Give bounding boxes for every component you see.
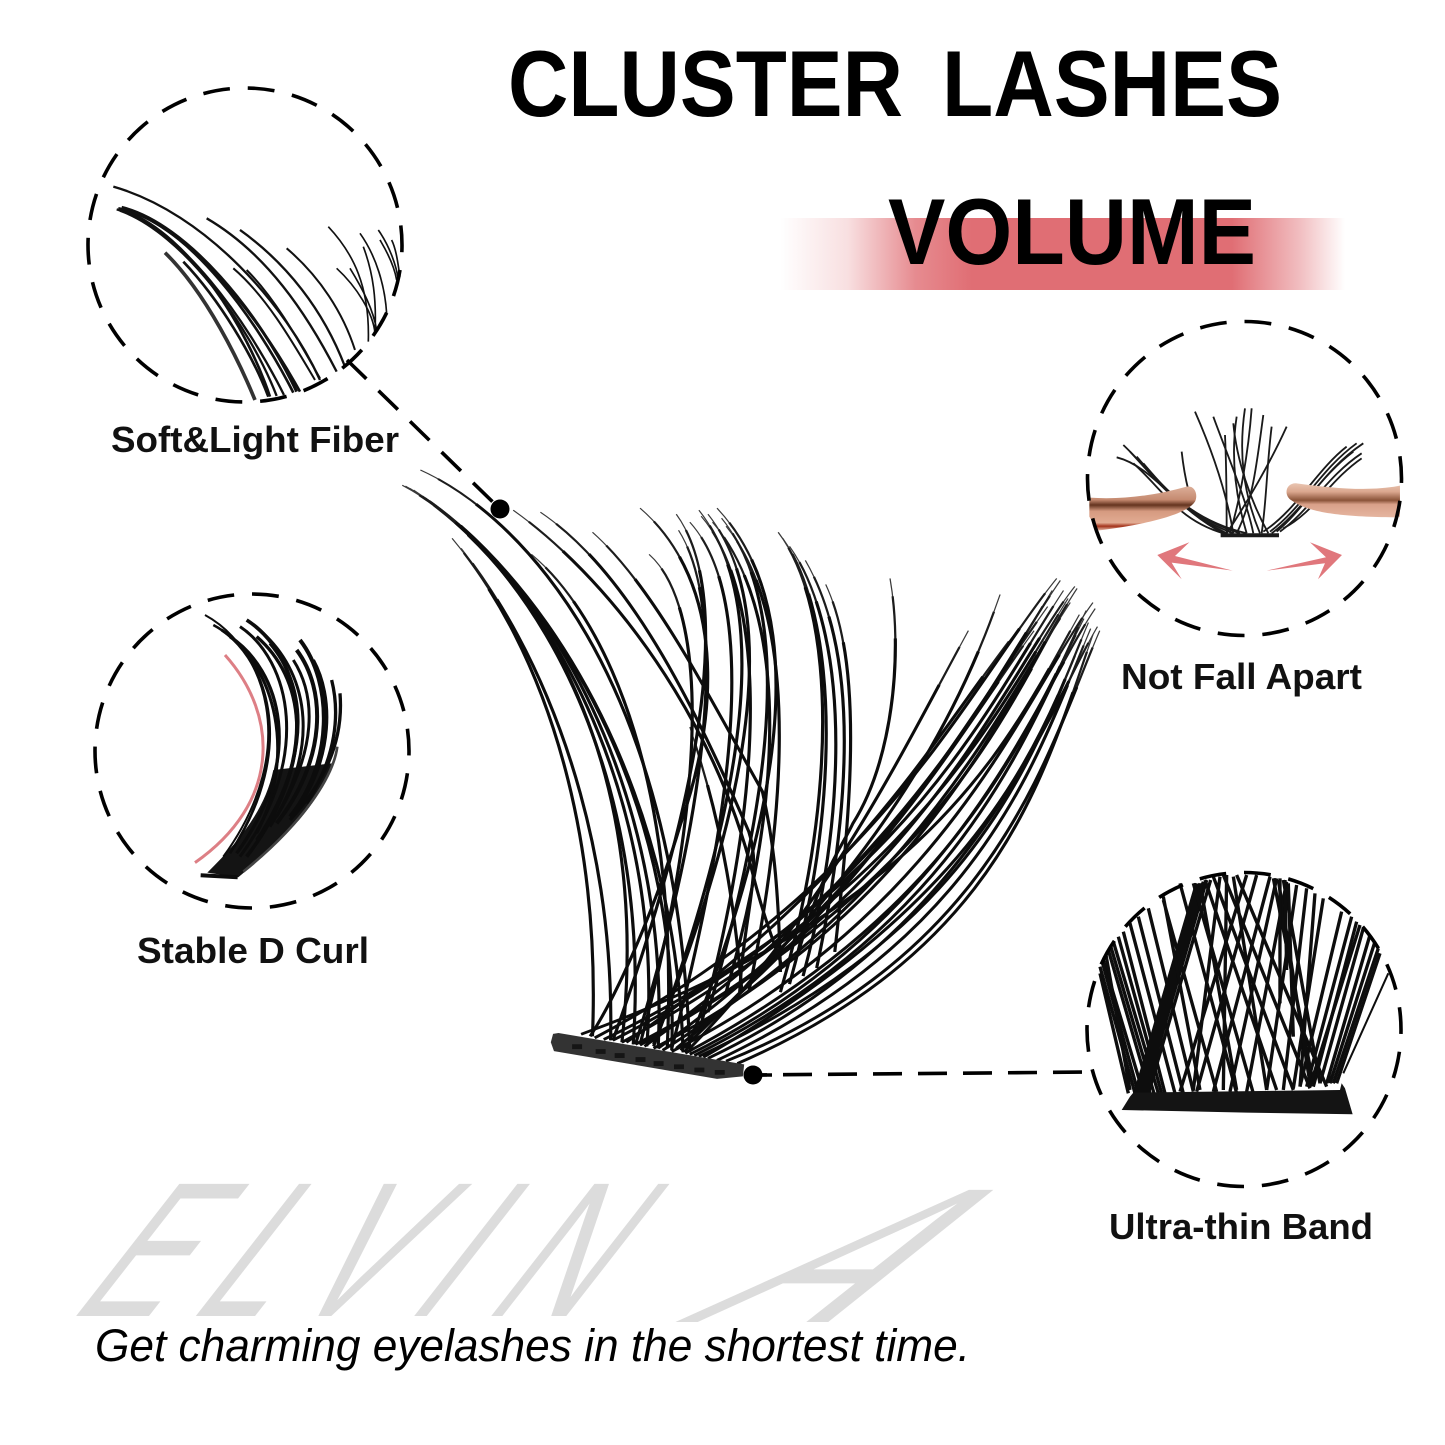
connector: band callout	[744, 1066, 1093, 1084]
label: ultra-thin band: Ultra-thin Band	[1109, 1206, 1373, 1247]
panel: not fall apart	[1088, 322, 1402, 636]
highlight bar	[780, 218, 1345, 290]
main lash cluster	[402, 470, 1100, 1079]
watermark: brand script: A	[604, 1149, 1130, 1363]
title: CLUSTER	[508, 31, 903, 136]
connector: fiber callout	[347, 360, 510, 518]
title: LASHES	[942, 31, 1282, 136]
label: soft and light fiber: Soft&Light Fiber	[111, 419, 399, 460]
arrow: right	[1267, 542, 1342, 579]
panel: soft and light fiber	[85, 85, 405, 405]
subtitle: VOLUME	[888, 179, 1256, 284]
panel: stable D curl	[95, 594, 409, 908]
icon: curl lashes	[195, 615, 340, 877]
icon: fiber lashes	[113, 187, 400, 400]
icon: lashes held by tweezers	[1089, 408, 1400, 579]
icon: band closeup	[1100, 875, 1388, 1114]
tagline: Get charming eyelashes in the shortest time.	[95, 1320, 970, 1371]
watermark: brand script	[33, 1142, 1130, 1363]
panel: ultra-thin band	[1087, 872, 1401, 1186]
label: stable D curl: Stable D Curl	[137, 930, 369, 971]
label: not fall apart: Not Fall Apart	[1121, 656, 1362, 697]
lash band	[551, 1033, 744, 1079]
arrow: left	[1157, 542, 1233, 579]
watermark: brand script: ELVIN	[33, 1142, 713, 1357]
